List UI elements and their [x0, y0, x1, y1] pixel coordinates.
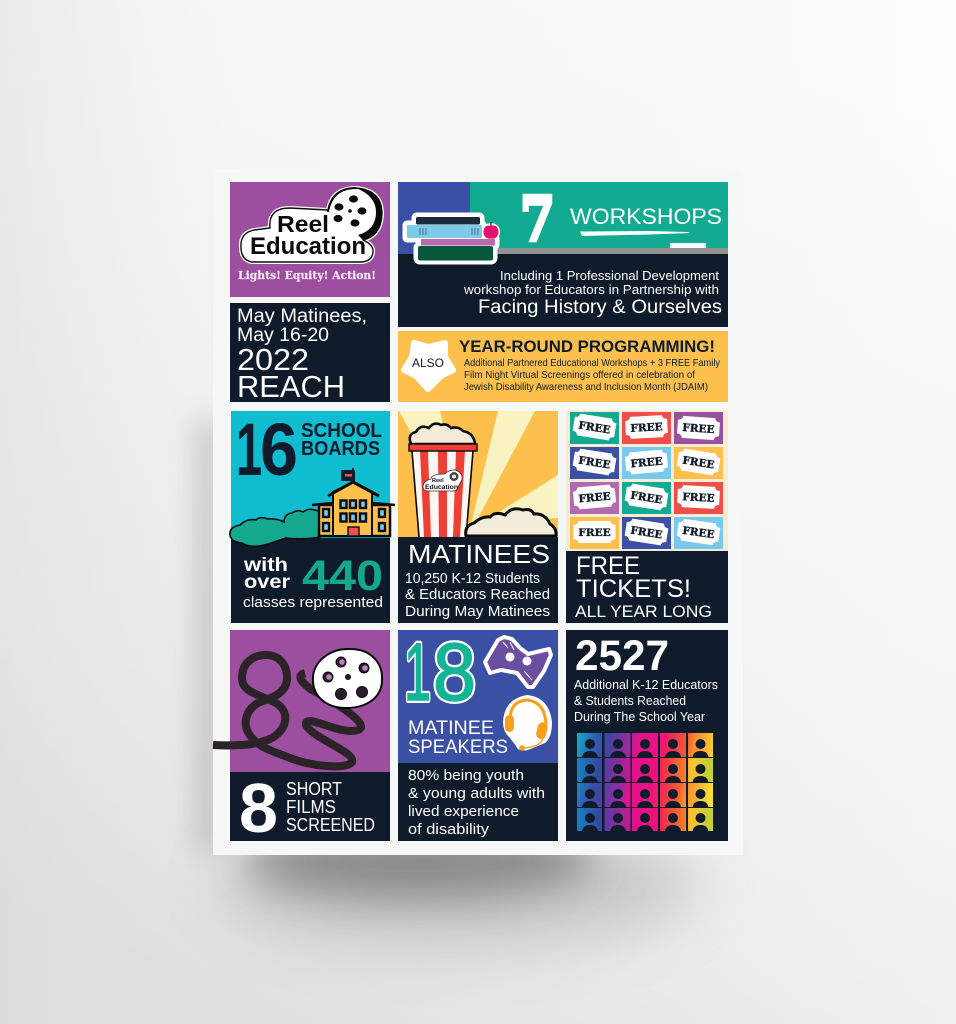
poster sheet [213, 169, 743, 855]
sun rays [399, 411, 558, 537]
number 18 [404, 627, 476, 718]
tickets grid: FREE [578, 455, 611, 471]
tickets grid: FREE [630, 421, 663, 435]
panel: year-round programming: YEAR-ROUND PROGRAMMING! [459, 337, 715, 356]
panel: school boards: BOARDS [301, 438, 380, 460]
panel: year-round programming: Film Night Virtual Screenings offered in celebration of [464, 370, 695, 381]
number 7: 7 [520, 182, 555, 256]
tickets grid: FREE [682, 525, 715, 541]
small logo: Education [425, 485, 458, 491]
logo badge: Education [250, 233, 366, 260]
icon: bushes [230, 509, 320, 546]
number 16: 1 [236, 408, 262, 491]
small logo [423, 470, 462, 491]
workshop details: Facing History & Ourselves [478, 297, 722, 318]
icon: popcorn cup [409, 424, 477, 537]
panel: 2022 reach [230, 303, 390, 404]
tickets grid: FREE [682, 455, 715, 471]
panel: matinee speakers: & young adults with [408, 785, 545, 802]
panel: matinee speakers: lived experience [408, 803, 519, 820]
icon: headset [503, 695, 552, 751]
panel: year-round programming: Additional Partnered Educational Workshops + 3 FREE Family [464, 358, 720, 369]
panel: school boards: over [244, 572, 291, 593]
icon: school [312, 468, 395, 536]
panel: matinee speakers: SPEAKERS [408, 736, 508, 758]
number 16 [236, 408, 298, 491]
tickets grid: FREE [630, 490, 663, 506]
number 18: 8 [433, 627, 476, 718]
number 18: 8 [433, 627, 476, 718]
panel: matinee speakers: of disability [408, 821, 490, 838]
panel: additional reach [566, 630, 728, 841]
chalk [670, 243, 706, 248]
panel: additional reach: & Students Reached [574, 694, 686, 708]
tagline: Lights! Equity! Action! [238, 268, 376, 282]
panel: school boards: SCHOOL [301, 420, 382, 442]
panel: school boards: with [243, 555, 288, 576]
panel: school boards: classes represented [243, 595, 383, 611]
panel: 2022 reach: REACH [237, 369, 345, 404]
workshop details: workshop for Educators in Partnership with [463, 283, 719, 297]
panel: short films [213, 630, 390, 847]
tickets grid: FREE [578, 491, 611, 505]
panel: free tickets: TICKETS! [576, 575, 691, 603]
icon: popcorn pile [466, 509, 556, 536]
icon: film ribbon and reel [213, 649, 382, 766]
panel: matinee speakers: MATINEE [408, 717, 494, 739]
logo badge: Reel [277, 211, 329, 237]
number 18: 1 [404, 627, 431, 718]
panel: additional reach: During The School Year [574, 710, 705, 724]
panel: school boards: 440 [302, 552, 383, 600]
tickets grid: FREE [578, 527, 611, 539]
poster shadow [198, 420, 700, 945]
icon: books and apple [407, 217, 498, 260]
panel: free tickets: FREE [576, 552, 640, 580]
panel: 2022 reach: May Matinees, [237, 306, 367, 327]
number 18: 1 [404, 627, 431, 718]
workshop details [463, 269, 722, 318]
icon: signing hands [485, 637, 551, 687]
panel: 2022 reach: 2022 [237, 342, 309, 377]
panel: matinees: MATINEES [408, 539, 550, 569]
tickets grid: FREE [578, 420, 611, 436]
panel: matinees: & Educators Reached [405, 587, 550, 603]
logo badge [241, 188, 382, 262]
panel: short films: SCREENED [286, 815, 375, 835]
chalk line [580, 231, 690, 236]
panel: additional reach: 2527 [575, 632, 669, 680]
workshop details: Including 1 Professional Development [500, 269, 720, 283]
panel: short films: SHORT [286, 779, 342, 799]
panel: short films: FILMS [286, 797, 336, 817]
tickets grid: FREE [630, 525, 663, 541]
tickets grid: FREE [630, 456, 663, 470]
panel: free tickets: ALL YEAR LONG [575, 602, 712, 621]
icon: star [404, 343, 453, 389]
workshops heading: WORKSHOPS [570, 204, 722, 229]
panel: workshops [398, 182, 728, 327]
panel: free tickets [566, 410, 728, 623]
tickets grid [570, 412, 723, 549]
panel: school boards [230, 408, 395, 623]
panel: logo [230, 182, 390, 297]
panel: year-round programming: Jewish Disability Awareness and Inclusion Month (JDAIM) [464, 382, 708, 393]
panel: matinees: 10,250 K-12 Students [405, 571, 540, 587]
panel: matinees [398, 411, 558, 623]
panel: matinees: During May Matinees [405, 604, 550, 620]
number 16: 6 [260, 408, 298, 491]
people grid [577, 733, 713, 831]
panel: short films: 8 [239, 769, 278, 847]
panel: additional reach: Additional K-12 Educators [574, 678, 718, 692]
icon: star: ALSO [412, 358, 444, 370]
tickets grid: FREE [682, 491, 715, 505]
panel: 2022 reach: May 16-20 [237, 325, 329, 346]
panel: matinee speakers [398, 627, 558, 841]
small logo: Reel [432, 478, 444, 484]
tickets grid: FREE [682, 422, 715, 436]
panel: year-round programming [398, 331, 728, 402]
panel: matinee speakers: 80% being youth [408, 767, 524, 784]
